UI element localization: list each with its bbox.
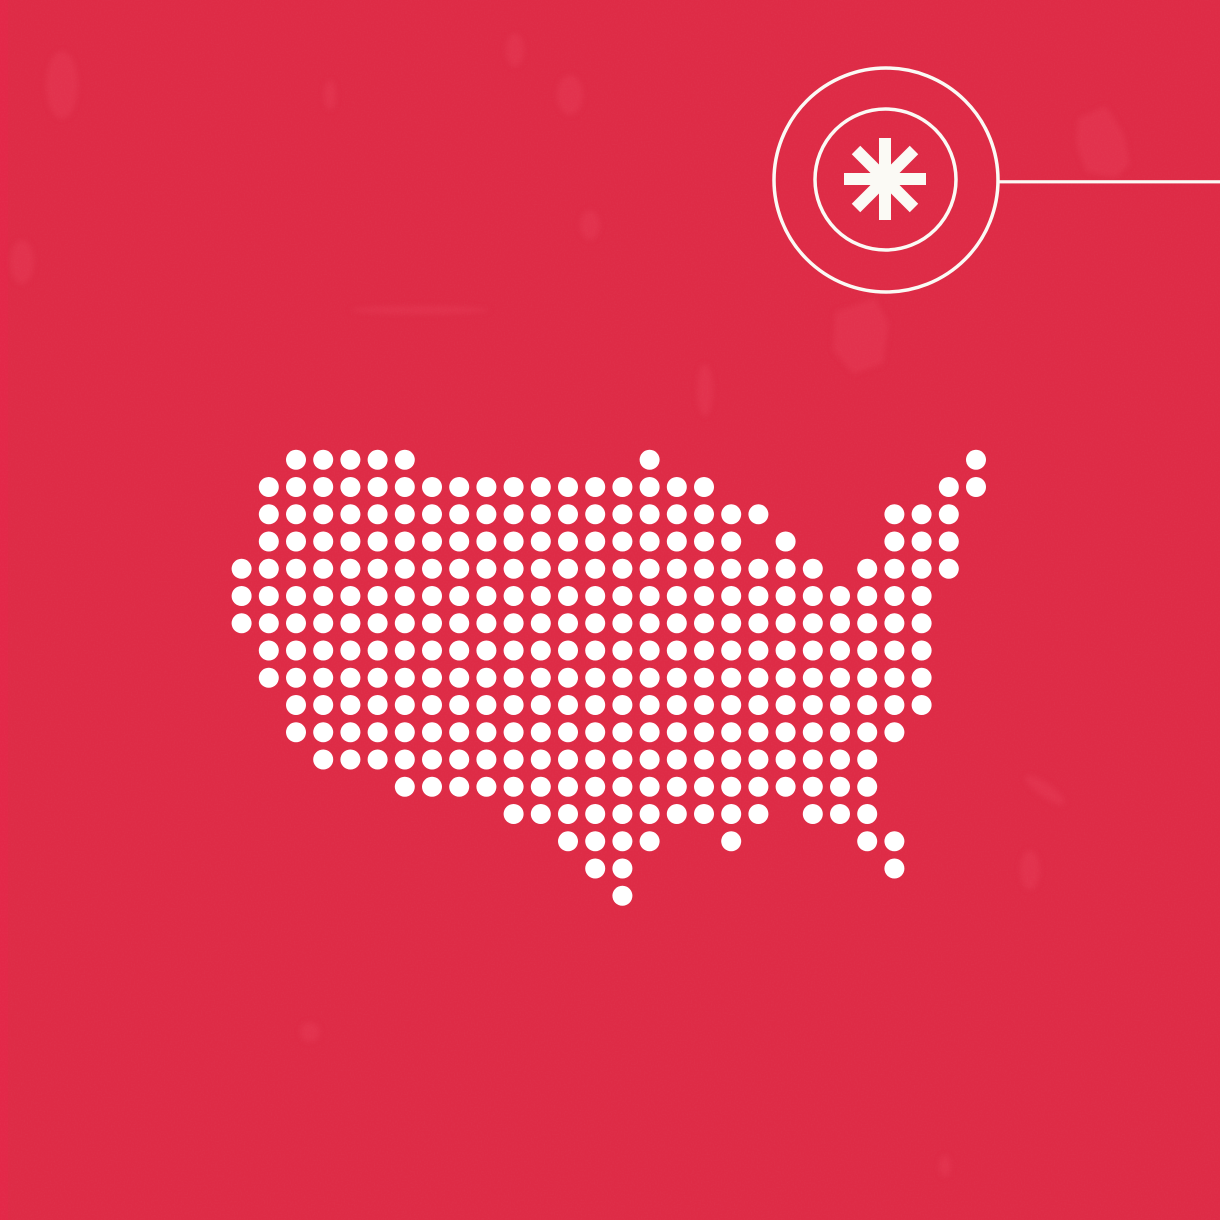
- icon: asterisk in double ring with connector line: [774, 68, 1220, 292]
- inner ring: [815, 109, 956, 250]
- outer ring: [774, 68, 998, 292]
- connector line: [999, 180, 1220, 183]
- dot map of the United States: [242, 460, 977, 896]
- asterisk: [844, 138, 926, 220]
